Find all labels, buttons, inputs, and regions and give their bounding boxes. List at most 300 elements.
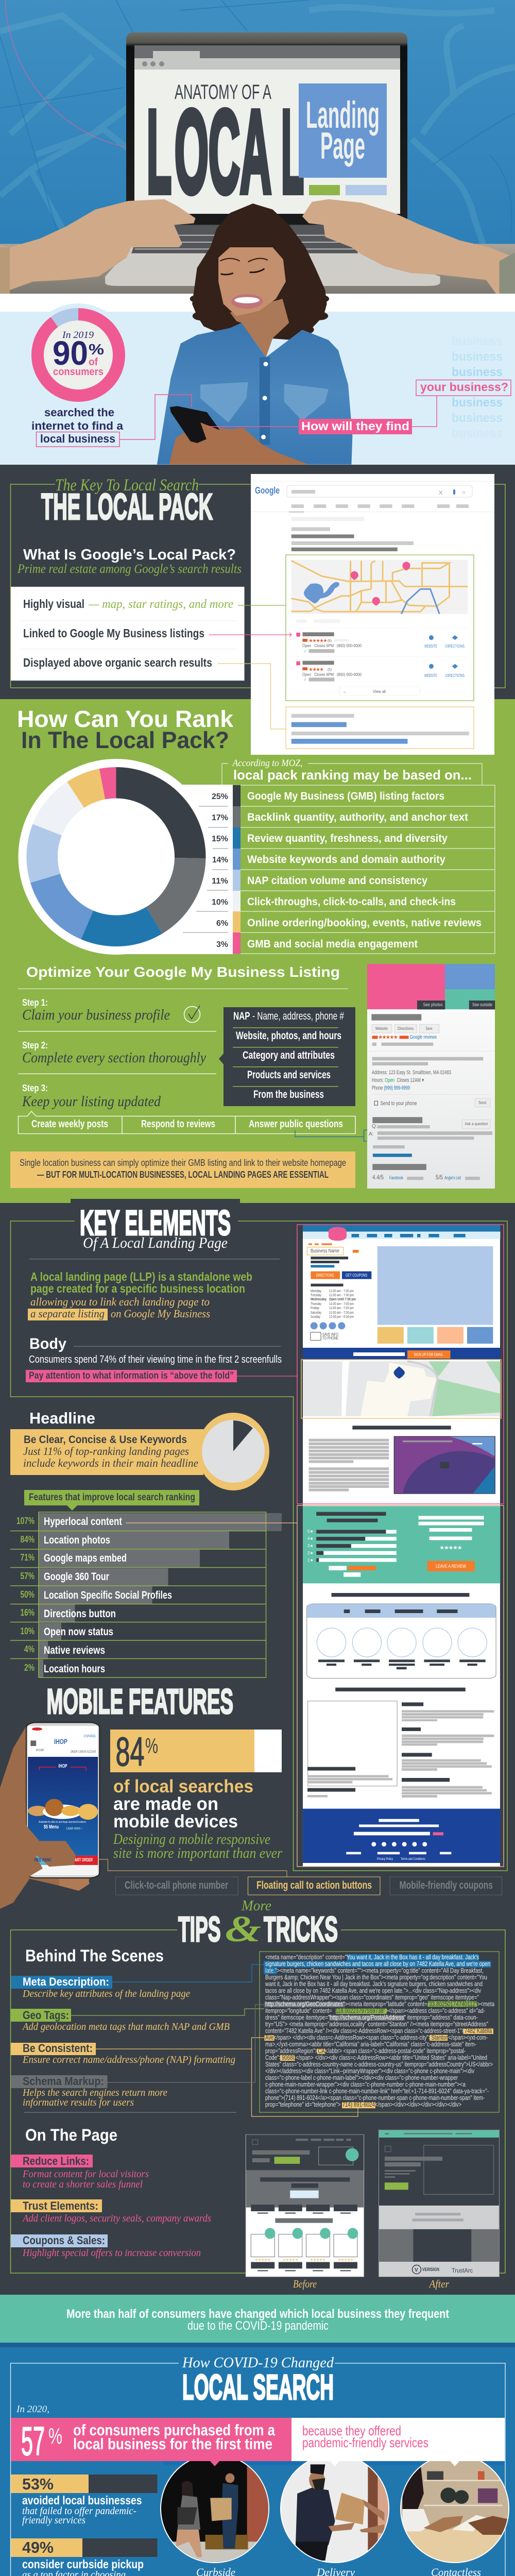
tips list: behind the scenes: Helps the search engines return more	[22, 2087, 167, 2098]
table: ranking factors: Review quantity, freshness, and diversity	[247, 833, 448, 844]
phone in hand	[0, 1722, 99, 1909]
tips list: on the page: to create a shorter sales funnel	[23, 2179, 143, 2190]
panel: gmb profile sections: Category and attributes	[243, 1049, 335, 1061]
title: anatomy of a local	[147, 81, 304, 217]
landing page mockup: Sunday	[311, 1315, 320, 1319]
stat band: 57 percent: 57	[21, 2418, 45, 2464]
stat band: 57 percent: pandemic-friendly services	[302, 2435, 428, 2450]
gmb listing mockup: Send	[478, 1100, 486, 1105]
panel: the local pack: Prime real estate among Google’s search results	[17, 562, 242, 576]
text: searched the internet: local business	[40, 432, 115, 445]
google results mockup: WEBSITE	[424, 673, 437, 678]
title: how covid-19 changed local search: LOCAL SEARCH	[182, 2367, 334, 2407]
title: key elements: KEY ELEMENTS	[80, 1203, 231, 1243]
text block: what is a local landing page: allowing you to link each landing page to	[30, 1295, 210, 1308]
gmb listing mockup: Ask a question	[465, 1122, 488, 1126]
steps list: Step 2:	[22, 1040, 48, 1050]
headline stat: 11 percent: Just 11% of top-ranking landing pages	[23, 1445, 189, 1458]
google results mockup: ○	[462, 489, 466, 496]
donut chart: ranking factors	[19, 759, 233, 955]
landing page mockup: 4★	[307, 1536, 314, 1541]
stat: 84 percent mobile: %	[145, 1734, 158, 1758]
landing page mockup: 11:00 am - 7:00 pm	[329, 1302, 354, 1306]
google results mockup: View all	[373, 689, 386, 694]
tips list: on the page: Format content for local visitors	[22, 2168, 149, 2180]
arrow: questions to mockup	[295, 1130, 367, 1141]
bar chart: features that improve ranking: Directions button	[44, 1608, 116, 1620]
photo: woman with phone	[157, 204, 352, 465]
bar chart: features that improve ranking: Location hours	[44, 1663, 105, 1675]
title: more tips and tricks	[10, 1898, 505, 2273]
bar chart: features that improve ranking: 4%	[24, 1644, 35, 1654]
hero: blue map background	[0, 0, 515, 294]
google results mockup: (6)	[328, 639, 332, 643]
steps list: Keep your listing updated	[22, 1094, 161, 1110]
list card: local pack benefits: Linked to Google My Business listings	[23, 626, 204, 640]
title: more tips and tricks: TRICKS	[264, 1909, 338, 1949]
stat band: 57 percent: %	[48, 2424, 62, 2449]
list card: local pack benefits: Highly visual	[23, 597, 84, 611]
title: key elements	[29, 1203, 280, 1259]
heading: how can you rank: How Can You Rank	[17, 706, 234, 732]
landing page mockup: Tuesday	[311, 1294, 321, 1297]
phone in hand: ESPAÑOL	[84, 1734, 96, 1738]
heading: optimize your gmb listing: Optimize Your Google My Business Listing	[26, 964, 340, 980]
icon: check circle	[184, 1006, 200, 1022]
landing page mockup: 5★	[307, 1529, 314, 1534]
security logos	[412, 2265, 473, 2274]
search bar	[287, 485, 472, 497]
tips list: behind the scenes: Meta Description:	[23, 1975, 109, 1988]
text block: what is a local landing page: A local landing page (LLP) is a standalone web	[30, 1270, 252, 1283]
stat: 49 percent	[11, 2538, 158, 2576]
google results mockup: WEBSITE	[424, 644, 437, 649]
connectors: labels to code	[71, 1964, 358, 2116]
gmb listing mockup: Q:	[372, 1124, 377, 1129]
bar chart: features that improve ranking: 107%	[16, 1516, 35, 1526]
list card: local pack benefits: — map, star ratings, and more	[88, 598, 233, 611]
tips list: on the page: Trust Elements:	[23, 2199, 98, 2212]
mockup reviews	[303, 1506, 500, 1583]
donut stat: 90 percent of consumers: of	[89, 357, 98, 368]
stat: 84 percent mobile: are made on	[113, 1794, 218, 1814]
google logo: Google	[255, 485, 280, 496]
bar chart: features that improve ranking: 2%	[24, 1663, 35, 1673]
landing page mockup: Terms and Conditions	[401, 1858, 425, 1861]
bar chart: features that improve ranking: Native reviews	[44, 1645, 105, 1656]
gmb listing mockup: See photos	[423, 1002, 443, 1007]
gmb listing mockup: Directions	[398, 1026, 414, 1031]
local pack listings	[291, 619, 468, 696]
tips list: behind the scenes: Be Consistent:	[23, 2042, 93, 2055]
landing page mockup: 11:00 am - 7:00 pm	[329, 1294, 354, 1297]
donut ring	[31, 308, 125, 402]
table: ranking factors: Website keywords and domain authority	[247, 854, 445, 866]
google results mockup: →	[342, 689, 347, 694]
landing page mockup: 11:00 am - 7:00 pm	[329, 1311, 354, 1315]
google results mockup: ✓	[303, 677, 307, 682]
organic results	[291, 714, 469, 744]
code sample panel: itemprop="longitude" content="-118.00223797559738"></span><address class="c-address" id="ad-	[265, 2007, 485, 2014]
mockup email bar: SIGN UP FOR EMAIL	[414, 1352, 443, 1357]
title: more tips and tricks: TIPS	[178, 1909, 220, 1949]
google results mockup: ★★★★★	[309, 638, 328, 643]
before page mockup: ★★★★★	[283, 2258, 299, 2262]
panel: gmb profile sections: Website, photos, and hours	[236, 1030, 341, 1042]
text block: body	[26, 1335, 297, 1382]
landing page mockup: 1★	[307, 1558, 314, 1563]
section background: white strip and pale blue	[0, 294, 515, 465]
headline stat: 11 percent	[10, 1409, 269, 1490]
donut chart: ranking factors: 25%	[212, 792, 228, 801]
section background: how can you rank	[0, 699, 515, 1203]
stat: 84 percent mobile: 84	[115, 1728, 144, 1774]
google results mockup: Open Closes 6PM (800) 000-0000	[302, 643, 362, 648]
donut stat: 90 percent of consumers: %	[89, 342, 104, 358]
table: ranking factors: Google My Business (GMB) listing factors	[247, 790, 444, 802]
landing page mockup: DIRECTIONS	[316, 1273, 334, 1278]
table: ranking factors: Online ordering/booking, events, native reviews	[247, 917, 482, 929]
code sample panel: prop="telephone" id="telephone">(714) 891-6024</span></div></div></div></div></div>	[265, 2100, 461, 2108]
headline stat: 11 percent: Be Clear, Concise & Use Keywords	[24, 1434, 187, 1446]
phone in hand: ART ORDER	[75, 1857, 93, 1862]
donut chart: ranking factors: 11%	[212, 877, 228, 886]
text block: what is a local landing page: on Google My Business	[111, 1307, 210, 1320]
section background: covid local search	[0, 2343, 515, 2576]
stat: 49 percent: 49%	[22, 2538, 54, 2556]
landing page mockup: 11:00 am - 7:00 pm	[329, 1290, 354, 1293]
google results mockup: DIRECTIONS	[445, 644, 465, 649]
steps list: Claim your business profile	[22, 1007, 170, 1023]
donut stat: 90 percent of consumers	[27, 303, 130, 406]
text: searched the internet: internet to find a	[31, 419, 124, 432]
table: ranking factors: Backlink quantity, authority, and anchor text	[247, 811, 468, 823]
title: mobile features: MOBILE FEATURES	[46, 1682, 233, 1721]
bar chart: features that improve ranking: Google 360 Tour	[44, 1571, 109, 1583]
code sample panel: Ave</span> </div><div class=c-AddressRow><span class="c-address-city">Stanton</span><yxt-com-	[265, 2033, 488, 2041]
stat band: 57 percent: of consumers purchased from a	[73, 2421, 276, 2439]
before page mockup: ★★★★★	[310, 2258, 326, 2262]
table: ranking factors: GMB and social media engagement	[247, 938, 418, 950]
tips list: behind the scenes: Ensure correct name/address/phone (NAP) formatting	[22, 2054, 235, 2065]
steps list: Step 1:	[22, 997, 48, 1008]
bar chart: features that improve ranking: Location photos	[44, 1534, 110, 1546]
landing page mockup: ★★★★★	[440, 1545, 462, 1550]
landing page mockup: TO PHONE	[322, 1336, 338, 1341]
donut stat: 90 percent of consumers: consumers	[53, 366, 104, 378]
photo: delivery	[279, 2452, 391, 2563]
phone in hand: $5 Menu	[44, 1824, 59, 1830]
heading: behind the scenes: Behind The Scenes	[25, 1946, 164, 1965]
callout: how will they find: How will they find	[301, 419, 409, 433]
stat: 53 percent: friendly services	[22, 2515, 85, 2526]
arrows: list to mockup	[209, 605, 291, 729]
tips list: on the page	[11, 2126, 211, 2259]
before page mockup	[246, 2134, 364, 2290]
repeating word list: your business	[416, 334, 511, 440]
tips list: behind the scenes: Describe key attributes of the landing page	[22, 1988, 190, 1999]
banner: consumers changed local business	[0, 2295, 515, 2343]
security logos: V	[415, 2267, 418, 2273]
stat: 53 percent: avoided local businesses	[22, 2494, 142, 2507]
after page mockup: After	[428, 2278, 450, 2290]
title: more tips and tricks: More	[241, 1898, 271, 1914]
banner: consumers changed local business: due to the COVID-19 pandemic	[187, 2319, 329, 2333]
text block: body: Consumers spend 74% of their viewing time in the first 2 screenfulls	[29, 1354, 282, 1365]
code sample panel: dress" itemscope itemtype="http://schema.org/PostalAddress" itemprop="address" data-coun-	[265, 2013, 478, 2021]
title box: landing page	[299, 83, 387, 178]
phone in hand: MY IHOP	[36, 1749, 44, 1752]
landing page mockup: GET COUPONS	[346, 1273, 367, 1278]
heading: how can you rank: In The Local Pack?	[21, 727, 229, 753]
stat: 84 percent mobile: Designing a mobile responsive	[113, 1832, 270, 1848]
security logos: VERISIGN	[422, 2267, 439, 2272]
landing page mockup: Saturday	[311, 1311, 321, 1315]
google results mockup: (5)	[328, 668, 332, 672]
text: searched the internet: searched the	[44, 406, 114, 419]
phone in hand: IHOP	[54, 1737, 67, 1745]
bar chart: features that improve ranking: 50%	[21, 1589, 35, 1600]
tips list: on the page: Coupons & Sales:	[23, 2234, 105, 2247]
landing page mockup: Wednesday	[311, 1298, 327, 1301]
steps list: Complete every section thoroughly	[22, 1050, 207, 1066]
google results mockup	[251, 474, 494, 755]
heading: according to moz	[222, 758, 482, 785]
gmb listing mockup: Send to your phone	[380, 1100, 417, 1107]
tips list: on the page: Highlight special offers to increase conversion	[22, 2247, 201, 2259]
donut chart: ranking factors: 6%	[216, 919, 228, 928]
headline stat: 11 percent: include keywords in their main headline	[23, 1456, 198, 1469]
gmb listing mockup: Website	[375, 1026, 388, 1031]
title: anatomy of a local: ANATOMY OF A	[175, 81, 271, 104]
boxes: mobile feature chips: Floating call to action buttons	[256, 1879, 372, 1891]
section background: key elements	[0, 1199, 515, 2295]
tips list: on the page: On The Page	[25, 2126, 117, 2144]
bar chart: features that improve ranking: 10%	[21, 1626, 35, 1636]
phone in hand: Available for dine-in and large assorted locations	[39, 1821, 86, 1824]
landing page mockup: SAVE INFO	[322, 1332, 338, 1337]
repeating word list: your business: business	[452, 334, 503, 348]
bar chart: features that improve ranking: 71%	[21, 1552, 35, 1563]
mockup footer	[303, 1809, 500, 1863]
laptop screen: OCA	[175, 87, 271, 217]
mockup article and video	[309, 1426, 495, 1494]
donut chart: ranking factors: 10%	[212, 898, 228, 907]
google results mockup: Open Closes 6PM (800) 000-0000	[302, 672, 362, 677]
photo: contactless	[400, 2461, 509, 2563]
heading: how can you rank	[17, 706, 234, 753]
hands on laptop	[0, 199, 515, 294]
mockup email bar	[303, 1348, 500, 1360]
panel: gmb profile sections: NAP - Name, address, phone #	[233, 1010, 344, 1022]
bar chart: features that improve ranking: 57%	[21, 1571, 35, 1581]
tips list: on the page: Add client logos, security seals, company awards	[22, 2213, 211, 2224]
title: key elements: Of A Local Landing Page	[83, 1234, 228, 1251]
text block: body: Pay attention to what information is “above the fold”	[29, 1370, 234, 1381]
phone in hand: IHOP	[59, 1764, 67, 1769]
stat: 53 percent: that failed to offer pandemic-	[22, 2505, 136, 2517]
code sample panel: prop="addressRegion">CA</abbr> <span class="c-address-postal-code" itemprop="postal-	[265, 2047, 466, 2055]
after page mockup	[379, 2130, 499, 2290]
map with pins	[291, 560, 468, 614]
heading: what is google's local pack: What Is Google’s Local Pack?	[23, 547, 236, 563]
code sample panel: class="c-phone-label c-phone-main-label"></div><div class="c-phone-number-wrapper	[265, 2074, 458, 2081]
gmb listing mockup: ★★★★★	[379, 1035, 398, 1040]
highlight frames	[286, 555, 474, 701]
donut chart: ranking factors: 15%	[212, 835, 228, 843]
title: anatomy of a local: L	[147, 87, 171, 217]
text: searched the internet	[31, 395, 192, 447]
landing page mockup: Privacy Policy	[377, 1858, 393, 1861]
title: how covid-19 changed local search	[16, 2354, 334, 2415]
gmb listing mockup: Save	[425, 1026, 433, 1031]
gmb listing mockup: Google reviews	[410, 1035, 437, 1040]
landing page mockup: Monday	[311, 1290, 321, 1293]
repeating word list: your business: business	[452, 411, 503, 425]
tips list: behind the scenes: Add geolocation meta tags that match NAP and GMB	[22, 2021, 230, 2032]
boxes: mobile feature chips: Click-to-call phone number	[125, 1879, 228, 1891]
table: ranking factors: Click-throughs, click-to-calls, and check-ins	[247, 896, 456, 908]
gmb listing mockup: A:	[369, 1131, 373, 1137]
bar chart: features that improve ranking: 16%	[21, 1607, 35, 1618]
phone in hand: REE PANC	[35, 1857, 52, 1862]
landing page mockup: Business Name	[311, 1248, 339, 1254]
code highlights	[264, 1954, 491, 1974]
headline stat: 11 percent: Headline	[29, 1409, 95, 1427]
stat band: 57 percent: local business for the first time	[73, 2435, 272, 2453]
stat band: 57 percent: because they offered	[302, 2423, 401, 2438]
bar chart: features that improve ranking: Google maps embed	[44, 1552, 127, 1564]
stat: 84 percent mobile: of local searches	[113, 1776, 253, 1797]
bar chart: features that improve ranking: Hyperlocal content	[44, 1516, 122, 1528]
title: how covid-19 changed local search: How COVID-19 Changed	[182, 2354, 334, 2371]
tips list: behind the scenes	[11, 1975, 236, 2113]
gmb listing mockup: Facebook	[389, 1175, 403, 1180]
landing page mockup: 2★	[307, 1551, 314, 1555]
gmb listing mockup: Angie’s List	[444, 1175, 461, 1180]
donut chart: ranking factors: 14%	[212, 856, 228, 865]
tips list: behind the scenes: Geo Tags:	[23, 2009, 69, 2022]
landing page mockup: Open Until 7:00 pm	[329, 1298, 356, 1301]
callout: how will they find	[207, 396, 437, 434]
gmb listing mockup	[367, 964, 495, 1189]
heading: according to moz: local pack ranking may be based on...	[233, 767, 472, 783]
panel: gmb profile sections	[219, 1007, 355, 1106]
tips list: on the page: Reduce Links:	[23, 2155, 89, 2167]
callout: multi-location businesses: — BUT FOR MULTI-LOCATION BUSINESSES, LOCAL LANDING PAGES ARE ESSENTIAL	[37, 1170, 329, 1180]
photo captions	[196, 2566, 481, 2576]
landing page mockup: LEAVE A REVIEW	[436, 1564, 466, 1569]
laptop screen	[126, 32, 407, 233]
stat: 53 percent: 53%	[22, 2475, 54, 2493]
code sample panel	[260, 1952, 499, 2112]
laptop base and desk	[0, 214, 515, 294]
before page mockup: Before	[293, 2278, 317, 2290]
bar chart: features that improve ranking: Open now status	[44, 1626, 113, 1638]
before page mockup: ★★★★★	[338, 2258, 354, 2262]
landing page mockup	[297, 1225, 504, 1867]
google results mockup: DIRECTIONS	[445, 673, 465, 678]
repeating word list: your business: business	[452, 396, 503, 410]
list card: local pack benefits: Displayed above organic search results	[23, 656, 212, 669]
text block: what is a local landing page: a separate listing	[30, 1307, 105, 1320]
leader lines	[183, 806, 228, 933]
gmb listing mockup: See outside	[472, 1002, 492, 1007]
phone in hand: Learn more ›	[66, 1827, 82, 1831]
boxes: mobile feature chips	[115, 1877, 502, 1895]
stat: 84 percent mobile: mobile devices	[113, 1811, 238, 1832]
callout: multi-location businesses: Single location business can simply optimize their GMB listing and link to their website homepage	[20, 1158, 346, 1168]
chart label	[24, 1490, 199, 1511]
pie: 11 percent	[202, 1420, 265, 1483]
stat: 84 percent mobile: site is more important than ever	[113, 1845, 282, 1861]
donut stat: 90 percent of consumers: 90	[53, 334, 88, 372]
table: ranking factors: NAP citation volume and consistency	[247, 875, 427, 887]
heading: according to moz: According to MOZ,	[232, 758, 303, 769]
photo: curbside	[160, 2461, 269, 2563]
gmb listing mockup: Phone (999) 999-9999	[372, 1085, 410, 1091]
title box: landing page: Landing	[306, 94, 380, 136]
landing page mockup: Thursday	[311, 1302, 321, 1306]
bar chart: features that improve ranking	[10, 1490, 282, 1677]
gmb listing mockup: 5/5	[436, 1174, 443, 1181]
arrow: pink curve into the L	[5, 0, 168, 155]
mockup text columns	[307, 1702, 494, 1798]
boxes: step 3 actions	[19, 1111, 355, 1133]
text block: what is a local landing page: page created for a specific business location	[30, 1282, 245, 1295]
panel: gmb profile sections: Products and services	[247, 1069, 331, 1081]
mockup header	[303, 1225, 500, 1241]
stat: 84 percent mobile	[110, 1728, 282, 1861]
title: how covid-19 changed local search: In 2020,	[16, 2404, 49, 2415]
gmb listing mockup: Hours: Open Closes 12AM ▾	[372, 1077, 424, 1083]
callout: multi-location businesses	[10, 1151, 355, 1188]
donut stat: 90 percent of consumers: In 2019	[62, 330, 94, 341]
title box: landing page: Page	[320, 125, 365, 167]
tips list: behind the scenes: Schema Markup:	[23, 2075, 104, 2088]
boxes: step 3 actions: Create weekly posts	[31, 1118, 108, 1130]
gmb listing mockup: Address: 123 Easy St. Smalltown, MA 02483	[372, 1070, 451, 1076]
landing page mockup: 3★	[307, 1544, 314, 1548]
landing page mockup: 12:00 pm - 6:00 pm	[329, 1315, 354, 1319]
mockup business info	[307, 1243, 493, 1344]
before page mockup: ★★★★★	[255, 2258, 271, 2262]
text block: what is a local landing page	[28, 1270, 252, 1320]
mockup highlight frames	[297, 1225, 504, 1867]
repeating word list: your business: business	[452, 350, 503, 364]
title: more tips and tricks: &	[225, 1908, 261, 1950]
google results mockup: X	[439, 490, 443, 496]
phone in hand: ORDER / CREATE ACCOUNT	[71, 1751, 96, 1754]
arrow: phone to floating buttons	[98, 1859, 287, 1877]
google results mockup: ★★★★	[309, 667, 324, 672]
repeating word list: your business: your business?	[420, 380, 508, 394]
laptop screen: L	[281, 87, 304, 217]
donut chart: ranking factors: 3%	[216, 940, 228, 949]
landing page mockup: 11:00 am - 7:00 pm	[329, 1307, 354, 1310]
repeating word list: your business: business	[452, 427, 503, 440]
title: the local pack: THE LOCAL PACK	[41, 487, 213, 528]
boxes: step 3 actions: Answer public questions	[249, 1118, 343, 1130]
panel: gmb profile sections: From the business	[253, 1089, 324, 1100]
stat band: 57 percent	[11, 2418, 505, 2466]
chart label: Features that improve local search ranking	[29, 1492, 195, 1503]
repeating word list: your business: business	[452, 365, 503, 379]
landing page mockup: Friday	[311, 1307, 319, 1310]
tips list: behind the scenes: informative results for users	[23, 2097, 134, 2108]
gmb listing mockup: 4.4/5	[372, 1174, 384, 1181]
text block: body: Body	[29, 1335, 66, 1352]
